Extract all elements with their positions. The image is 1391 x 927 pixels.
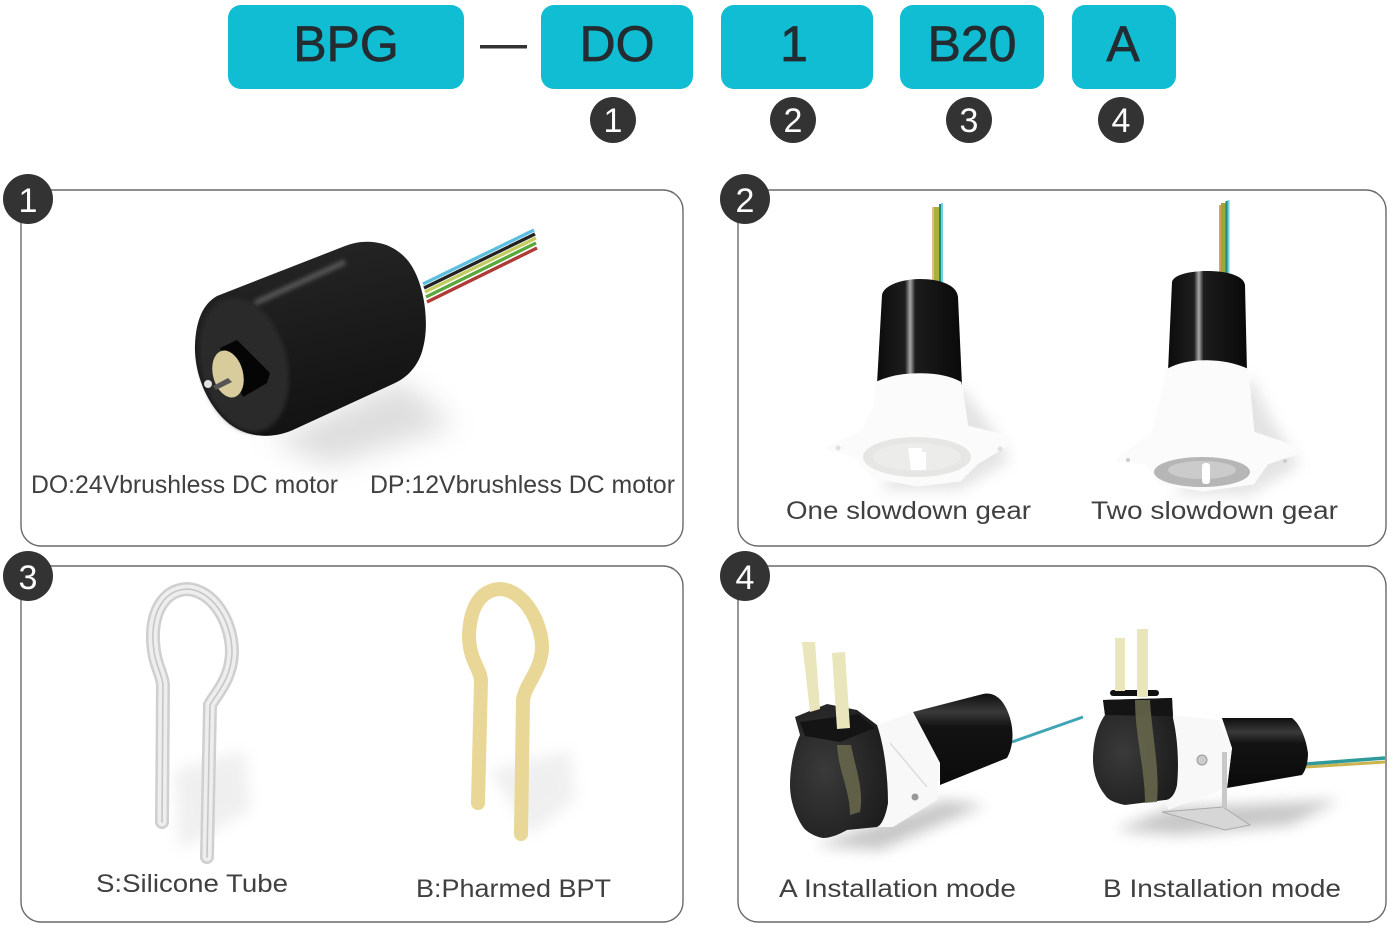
pump installation B (1093, 629, 1385, 835)
code box: B20: B20 (928, 16, 1016, 72)
brushless DC motor image (186, 230, 537, 465)
caption: B installation mode: B Installation mode (1103, 875, 1341, 903)
number marker 4: 4 (1112, 102, 1130, 140)
panel badge 1: 1 (19, 182, 37, 220)
code box: A: A (1106, 16, 1140, 72)
two slowdown gear pump (1117, 200, 1300, 495)
code box: 1: 1 (780, 16, 808, 72)
number marker 2: 2 (784, 102, 802, 140)
panel 4: installation mode (720, 551, 1386, 922)
panel badge 2: 2 (736, 182, 754, 220)
caption: two slowdown gear: Two slowdown gear (1091, 497, 1338, 525)
panel badge 4 (720, 551, 770, 601)
code box: A (1072, 5, 1176, 89)
panel 2: gear stage (720, 174, 1386, 546)
panel badge 3: 3 (19, 559, 37, 597)
caption: DO: DO:24Vbrushless DC motor (31, 471, 338, 499)
panel badge 1 (3, 174, 53, 224)
caption: DP: DP:12Vbrushless DC motor (370, 471, 675, 499)
number marker 1 (590, 97, 636, 143)
number marker 3: 3 (960, 102, 978, 140)
number marker 1: 1 (604, 102, 622, 140)
code box: B20 (900, 5, 1044, 89)
pump installation A (790, 642, 1083, 850)
Pharmed BPT tube (469, 589, 575, 835)
code box: DO (541, 5, 693, 89)
number marker 2 (770, 97, 816, 143)
number marker 4 (1098, 97, 1144, 143)
panel badge 4: 4 (736, 559, 754, 597)
model code header (228, 5, 1176, 143)
caption: silicone tube: S:Silicone Tube (96, 870, 288, 898)
panel badge 3 (3, 551, 53, 601)
panel badge 2 (720, 174, 770, 224)
number marker 3 (946, 97, 992, 143)
dash separator (480, 45, 527, 48)
panel 1: motor type (3, 174, 683, 546)
silicone tube (153, 589, 250, 857)
caption: Pharmed BPT: B:Pharmed BPT (416, 875, 611, 903)
code box: BPG (228, 5, 464, 89)
panel 3: tube material (3, 551, 683, 922)
caption: A installation mode: A Installation mode (779, 875, 1016, 903)
caption: one slowdown gear: One slowdown gear (786, 497, 1031, 525)
code box: DO: DO (580, 16, 654, 72)
code box: BPG: BPG (293, 16, 399, 72)
one slowdown gear pump (827, 203, 1010, 490)
code box: 1 (721, 5, 873, 89)
